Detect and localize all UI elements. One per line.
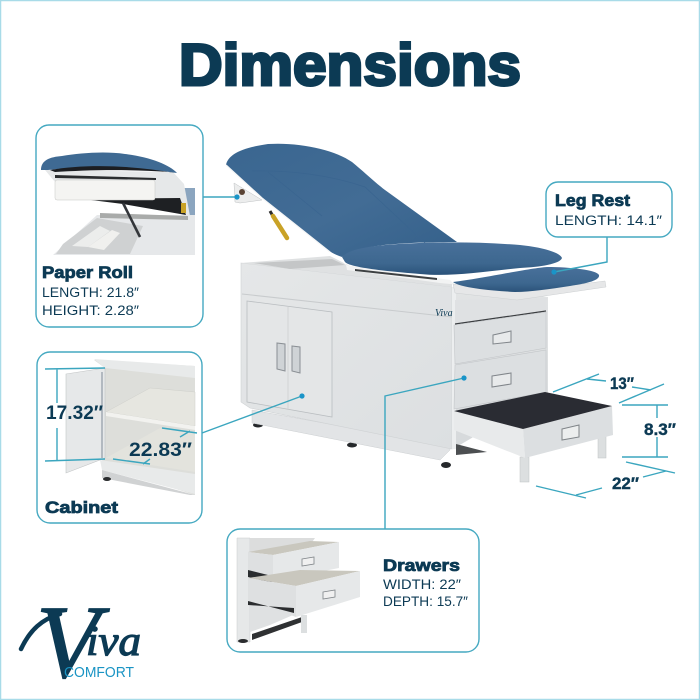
dimension: cabinet width xyxy=(113,428,197,464)
connector: paper roll xyxy=(203,194,240,200)
panel: paper roll xyxy=(36,125,203,327)
logo subtitle: COMFORT xyxy=(64,664,134,681)
paper roll text: HEIGHT: 2.28″ xyxy=(42,303,139,318)
cabinet plinth xyxy=(252,410,450,460)
panel: drawers xyxy=(227,529,479,652)
drawer: upper xyxy=(454,312,546,364)
small logo on cabinet: Viva xyxy=(435,308,453,319)
backrest cushion xyxy=(226,144,457,257)
photo: open cabinet xyxy=(66,359,195,495)
photo: paper roll compartment xyxy=(41,153,195,255)
connector: cabinet xyxy=(202,393,305,433)
logo wordmark: iva xyxy=(86,619,141,665)
cabinet top surface xyxy=(241,256,452,287)
table feet xyxy=(253,422,451,468)
leg rest cushion xyxy=(453,267,599,292)
drawer: lower xyxy=(454,350,546,409)
dimension: cabinet height xyxy=(45,368,105,461)
photo: open drawers xyxy=(237,538,360,643)
panel: leg rest: Leg Rest xyxy=(555,191,630,210)
paper roll text: Paper Roll xyxy=(42,263,133,282)
shelf under leg rest xyxy=(453,281,606,300)
paper roll text xyxy=(42,263,139,318)
cabinet front xyxy=(241,263,452,449)
logo: Viva Comfort xyxy=(21,585,141,700)
cabinet doors xyxy=(247,301,332,417)
dimension: 8.3 inch xyxy=(622,405,676,457)
drawers text: Drawers xyxy=(383,556,460,575)
panel: leg rest xyxy=(546,182,672,237)
panel: leg rest: LENGTH: 14.1″ xyxy=(555,213,662,228)
dimension: 22 inch xyxy=(536,462,675,498)
connector: leg rest xyxy=(551,237,607,275)
seat cushion xyxy=(342,242,562,275)
connector: drawers xyxy=(385,375,467,529)
strut and hinge xyxy=(270,211,274,218)
panel: cabinet xyxy=(37,352,202,523)
logo wordmark: V xyxy=(36,585,110,700)
title: Dimensions xyxy=(179,33,521,98)
pull-out step xyxy=(454,392,613,482)
cabinet label: Cabinet xyxy=(45,498,118,517)
drawers text: WIDTH: 22″ xyxy=(383,577,461,592)
dimension: cabinet width: 22.83″ xyxy=(129,439,192,461)
mattress rail xyxy=(346,265,454,284)
dimension: 13 inch xyxy=(553,374,664,403)
drawers text xyxy=(383,556,468,609)
logo swash xyxy=(21,614,60,649)
dimension: 13 inch: 13″ xyxy=(610,374,634,393)
drawers text: DEPTH: 15.7″ xyxy=(383,594,468,609)
paper roll text: LENGTH: 21.8″ xyxy=(42,285,139,300)
dimension: 22 inch: 22″ xyxy=(612,474,639,493)
dimension: cabinet height: 17.32″ xyxy=(46,402,103,424)
cabinet side panel xyxy=(452,287,548,449)
product: exam table xyxy=(226,144,613,482)
dimension: 8.3 inch: 8.3″ xyxy=(644,420,676,439)
